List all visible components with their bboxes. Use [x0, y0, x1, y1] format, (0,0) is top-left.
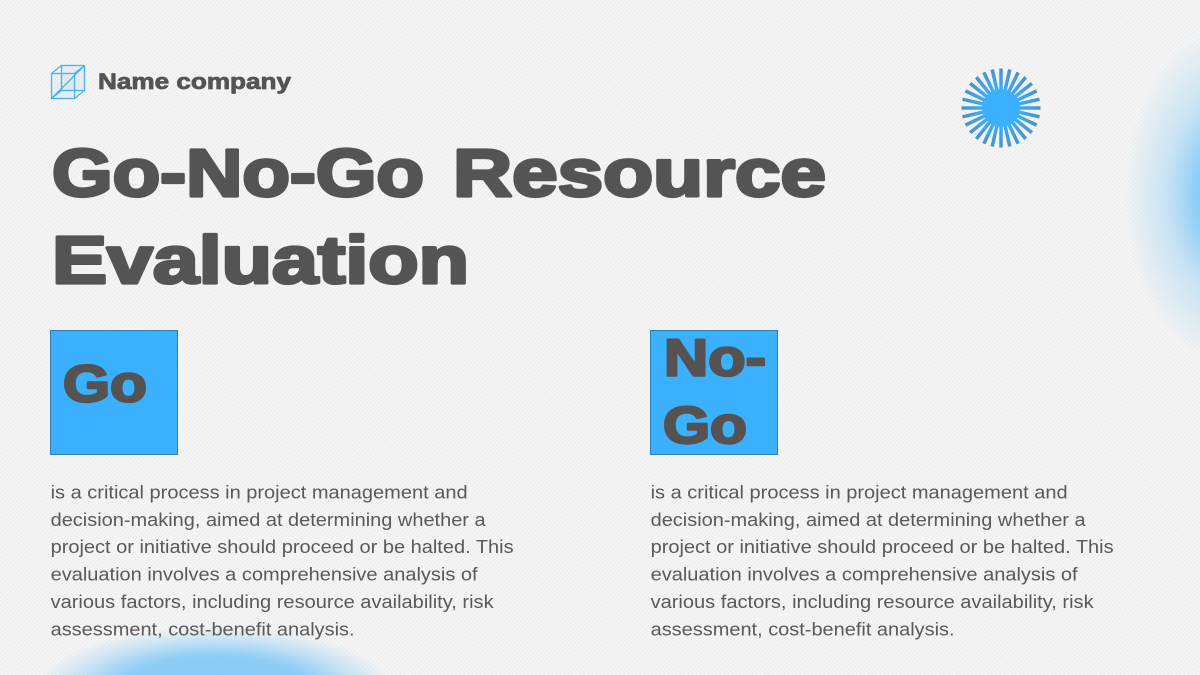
panel: Go	[50, 330, 514, 639]
No-Go label	[663, 330, 766, 455]
No-Go description: various factors, including resource availability, risk	[651, 591, 1094, 612]
panel: No-Go	[650, 330, 1114, 639]
No-Go label: No-	[664, 330, 766, 388]
No-Go label: Go	[663, 397, 747, 455]
Go description: project or initiative should proceed or be halted. This	[51, 536, 514, 557]
No-Go description: decision-making, aimed at determining whether a	[651, 509, 1086, 530]
Go description: decision-making, aimed at determining whether a	[51, 509, 486, 530]
title: Go-No-Go	[52, 136, 424, 211]
No-Go box	[650, 330, 778, 454]
Go description: assessment, cost-benefit analysis.	[51, 618, 355, 639]
title	[52, 136, 826, 298]
No-Go description: evaluation involves a comprehensive analysis of	[651, 564, 1078, 585]
Go description: various factors, including resource availability, risk	[51, 591, 494, 612]
No-Go description: assessment, cost-benefit analysis.	[651, 618, 955, 639]
Go box	[50, 330, 178, 454]
No-Go description	[651, 481, 1114, 639]
company name: Name company	[98, 69, 292, 94]
icon: sunburst	[962, 68, 1040, 148]
Go label: Go	[63, 356, 147, 414]
icon: company logo cubes	[52, 66, 84, 98]
No-Go description: project or initiative should proceed or be halted. This	[651, 536, 1114, 557]
Go description: evaluation involves a comprehensive analysis of	[51, 564, 478, 585]
No-Go description: is a critical process in project management and	[651, 481, 1068, 502]
Go description: is a critical process in project management and	[51, 481, 468, 502]
Go description	[51, 481, 514, 639]
title: Resource	[453, 136, 826, 211]
title: Evaluation	[52, 223, 469, 298]
